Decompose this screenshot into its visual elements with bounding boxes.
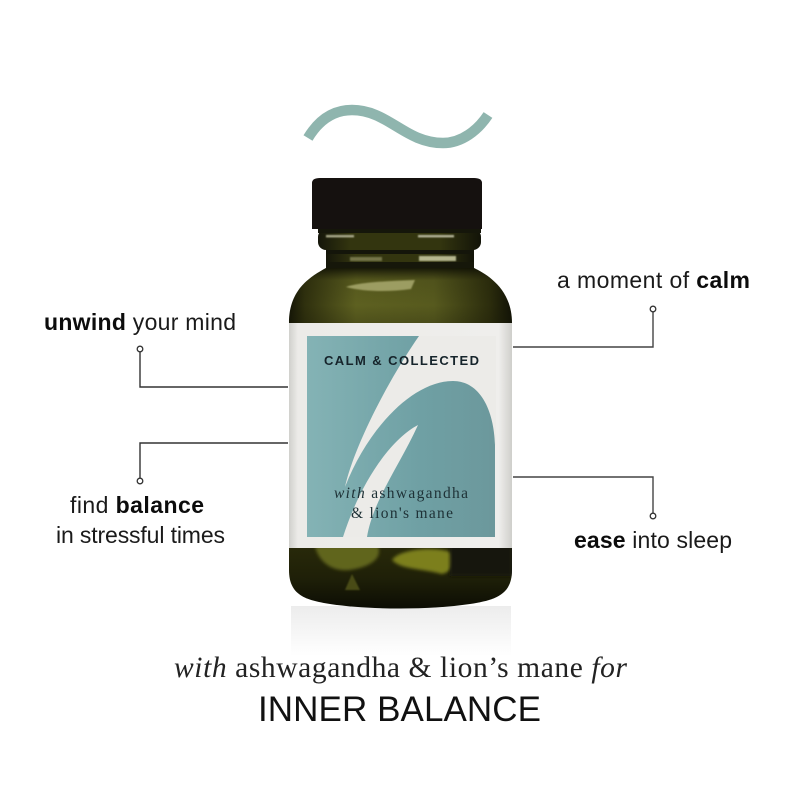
callout: unwind your mind — [44, 309, 288, 387]
label subtitle: with ashwagandha — [334, 485, 468, 502]
jar reflection — [291, 606, 511, 656]
glass highlight — [346, 280, 415, 291]
bottle glass shoulder — [289, 268, 512, 330]
white lower sweep — [343, 425, 418, 537]
tagline: with ashwagandha & lion’s mane for — [174, 652, 628, 684]
white upper sweep — [345, 336, 496, 487]
label teal artwork — [307, 336, 495, 537]
callout: a moment of calm: a moment of calm — [557, 267, 750, 293]
bottle base — [289, 540, 512, 608]
callout: ease into sleep — [513, 477, 732, 553]
label subtitle: & lion's mane — [351, 505, 453, 522]
callout: unwind your mind: unwind your mind — [44, 309, 236, 335]
callout: ease into sleep: ease into sleep — [574, 527, 732, 553]
bottle label — [289, 323, 512, 548]
product bottle — [289, 178, 512, 608]
cap — [312, 178, 482, 229]
icon: teal wave — [308, 110, 488, 143]
callout: find balance: in stressful times — [56, 522, 225, 548]
bottle neck — [318, 229, 481, 272]
callout: a moment of calm — [513, 267, 750, 347]
callout: find balance: find balance — [70, 492, 204, 518]
callout: find balance — [56, 443, 288, 548]
capsules inside — [315, 544, 512, 590]
heading: INNER BALANCE — [258, 690, 541, 729]
label title: CALM & COLLECTED — [324, 353, 479, 368]
